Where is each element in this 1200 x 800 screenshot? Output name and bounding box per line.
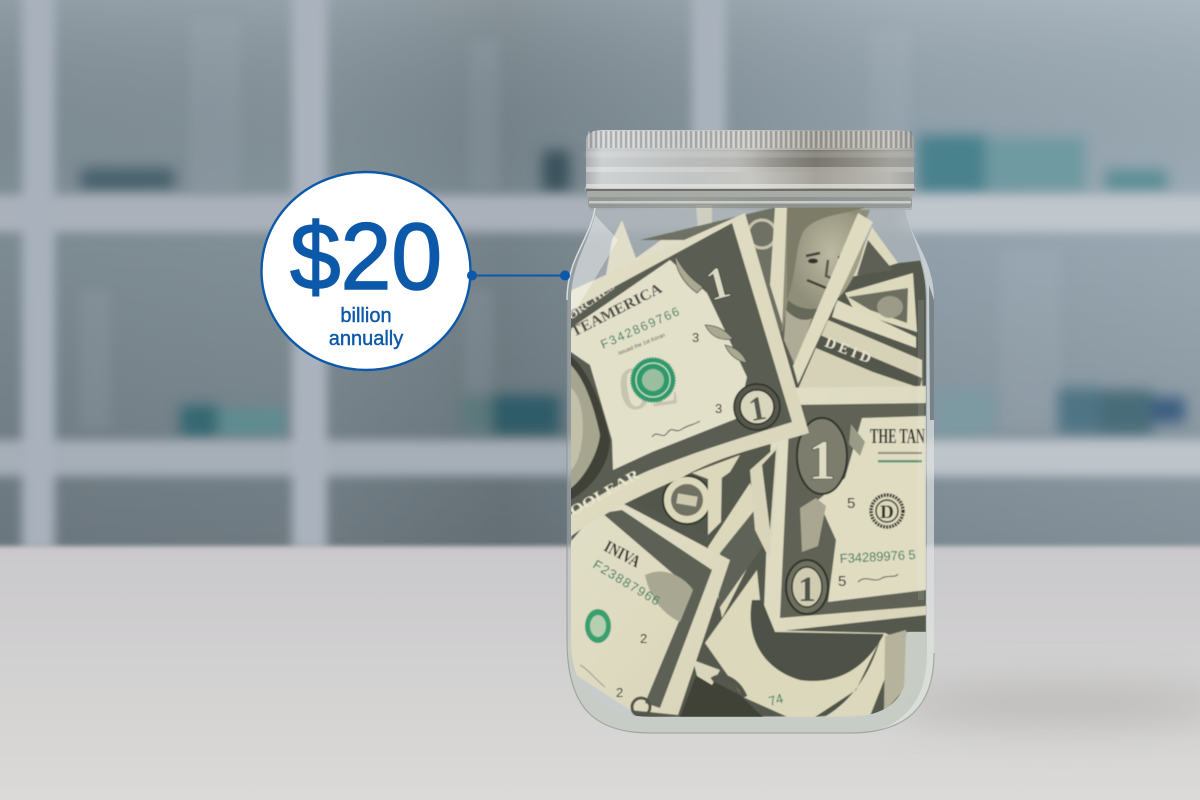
blurred bottles lower shelf xyxy=(180,388,1185,437)
lower left bill xyxy=(568,503,730,716)
leaves xyxy=(675,255,747,363)
right bill with THE TAN heading: 5 xyxy=(847,495,855,512)
table surface xyxy=(0,546,1200,800)
signature xyxy=(652,421,700,437)
lower left bill: F23887966 xyxy=(590,557,664,609)
middle small bills xyxy=(662,447,778,618)
background: blurred laboratory shelves xyxy=(0,0,1200,560)
bottom centre bill xyxy=(680,570,906,718)
heading along top edge: TEAMERICA xyxy=(569,281,665,341)
right bill with THE TAN heading: 1 xyxy=(808,430,836,492)
jar shadow on table xyxy=(890,685,1200,725)
dark interior xyxy=(572,260,926,717)
bottom edge text: OOLEAR xyxy=(568,467,644,519)
sub-label: annually: annually xyxy=(329,328,403,350)
large corner 1: 1 xyxy=(700,255,736,311)
pale ONE: OE xyxy=(614,349,681,425)
lower left bill: 2 xyxy=(640,631,647,646)
serial: F342869766 xyxy=(599,304,683,352)
Washington portrait bill xyxy=(782,207,873,384)
right bill with THE TAN heading: THE TAN xyxy=(870,424,925,448)
main front bill: 1 xyxy=(746,390,769,429)
green seal xyxy=(631,358,675,402)
metal jar lid xyxy=(585,130,916,191)
glass jar filled with dollar bills xyxy=(565,130,934,733)
blurred bottles top shelf xyxy=(80,135,1167,193)
bottom centre bill: 74 xyxy=(767,691,785,709)
glass reflections xyxy=(567,208,934,733)
right bill with THE TAN heading: 1 xyxy=(798,569,816,609)
sub-label: billion: billion xyxy=(340,305,392,327)
headline figure: $20 xyxy=(290,204,442,310)
right bill with THE TAN heading: F34289976 5 xyxy=(839,547,916,566)
lower left bill: 2 xyxy=(616,685,623,700)
back dark bill xyxy=(640,207,788,340)
right bill with THE TAN heading xyxy=(763,386,926,633)
back cream strips xyxy=(606,220,684,275)
upper right bills xyxy=(798,227,922,390)
corner medallion xyxy=(734,384,780,430)
jar neck rim xyxy=(587,191,913,208)
main front bill: 3 xyxy=(692,330,699,345)
main front bill xyxy=(565,213,809,537)
uprights xyxy=(22,0,55,550)
lower left bill: INIVA xyxy=(601,537,644,572)
bills stuffed inside jar xyxy=(565,205,926,718)
portrait oval xyxy=(571,356,610,500)
shelves xyxy=(0,195,1200,232)
main front bill: issued the 1st Koran xyxy=(618,333,666,357)
glass jar body xyxy=(567,192,934,733)
right bill with THE TAN heading: D xyxy=(880,502,894,523)
main front bill: ORCHES xyxy=(566,281,618,322)
upper right bills: DEID xyxy=(823,335,873,367)
main front bill: 3 xyxy=(715,401,722,416)
right bill with THE TAN heading: 5 xyxy=(838,573,846,590)
callout: $20 billion annually xyxy=(262,172,470,370)
blurred glassware xyxy=(80,20,1060,430)
connector line from jar to callout xyxy=(467,270,570,280)
